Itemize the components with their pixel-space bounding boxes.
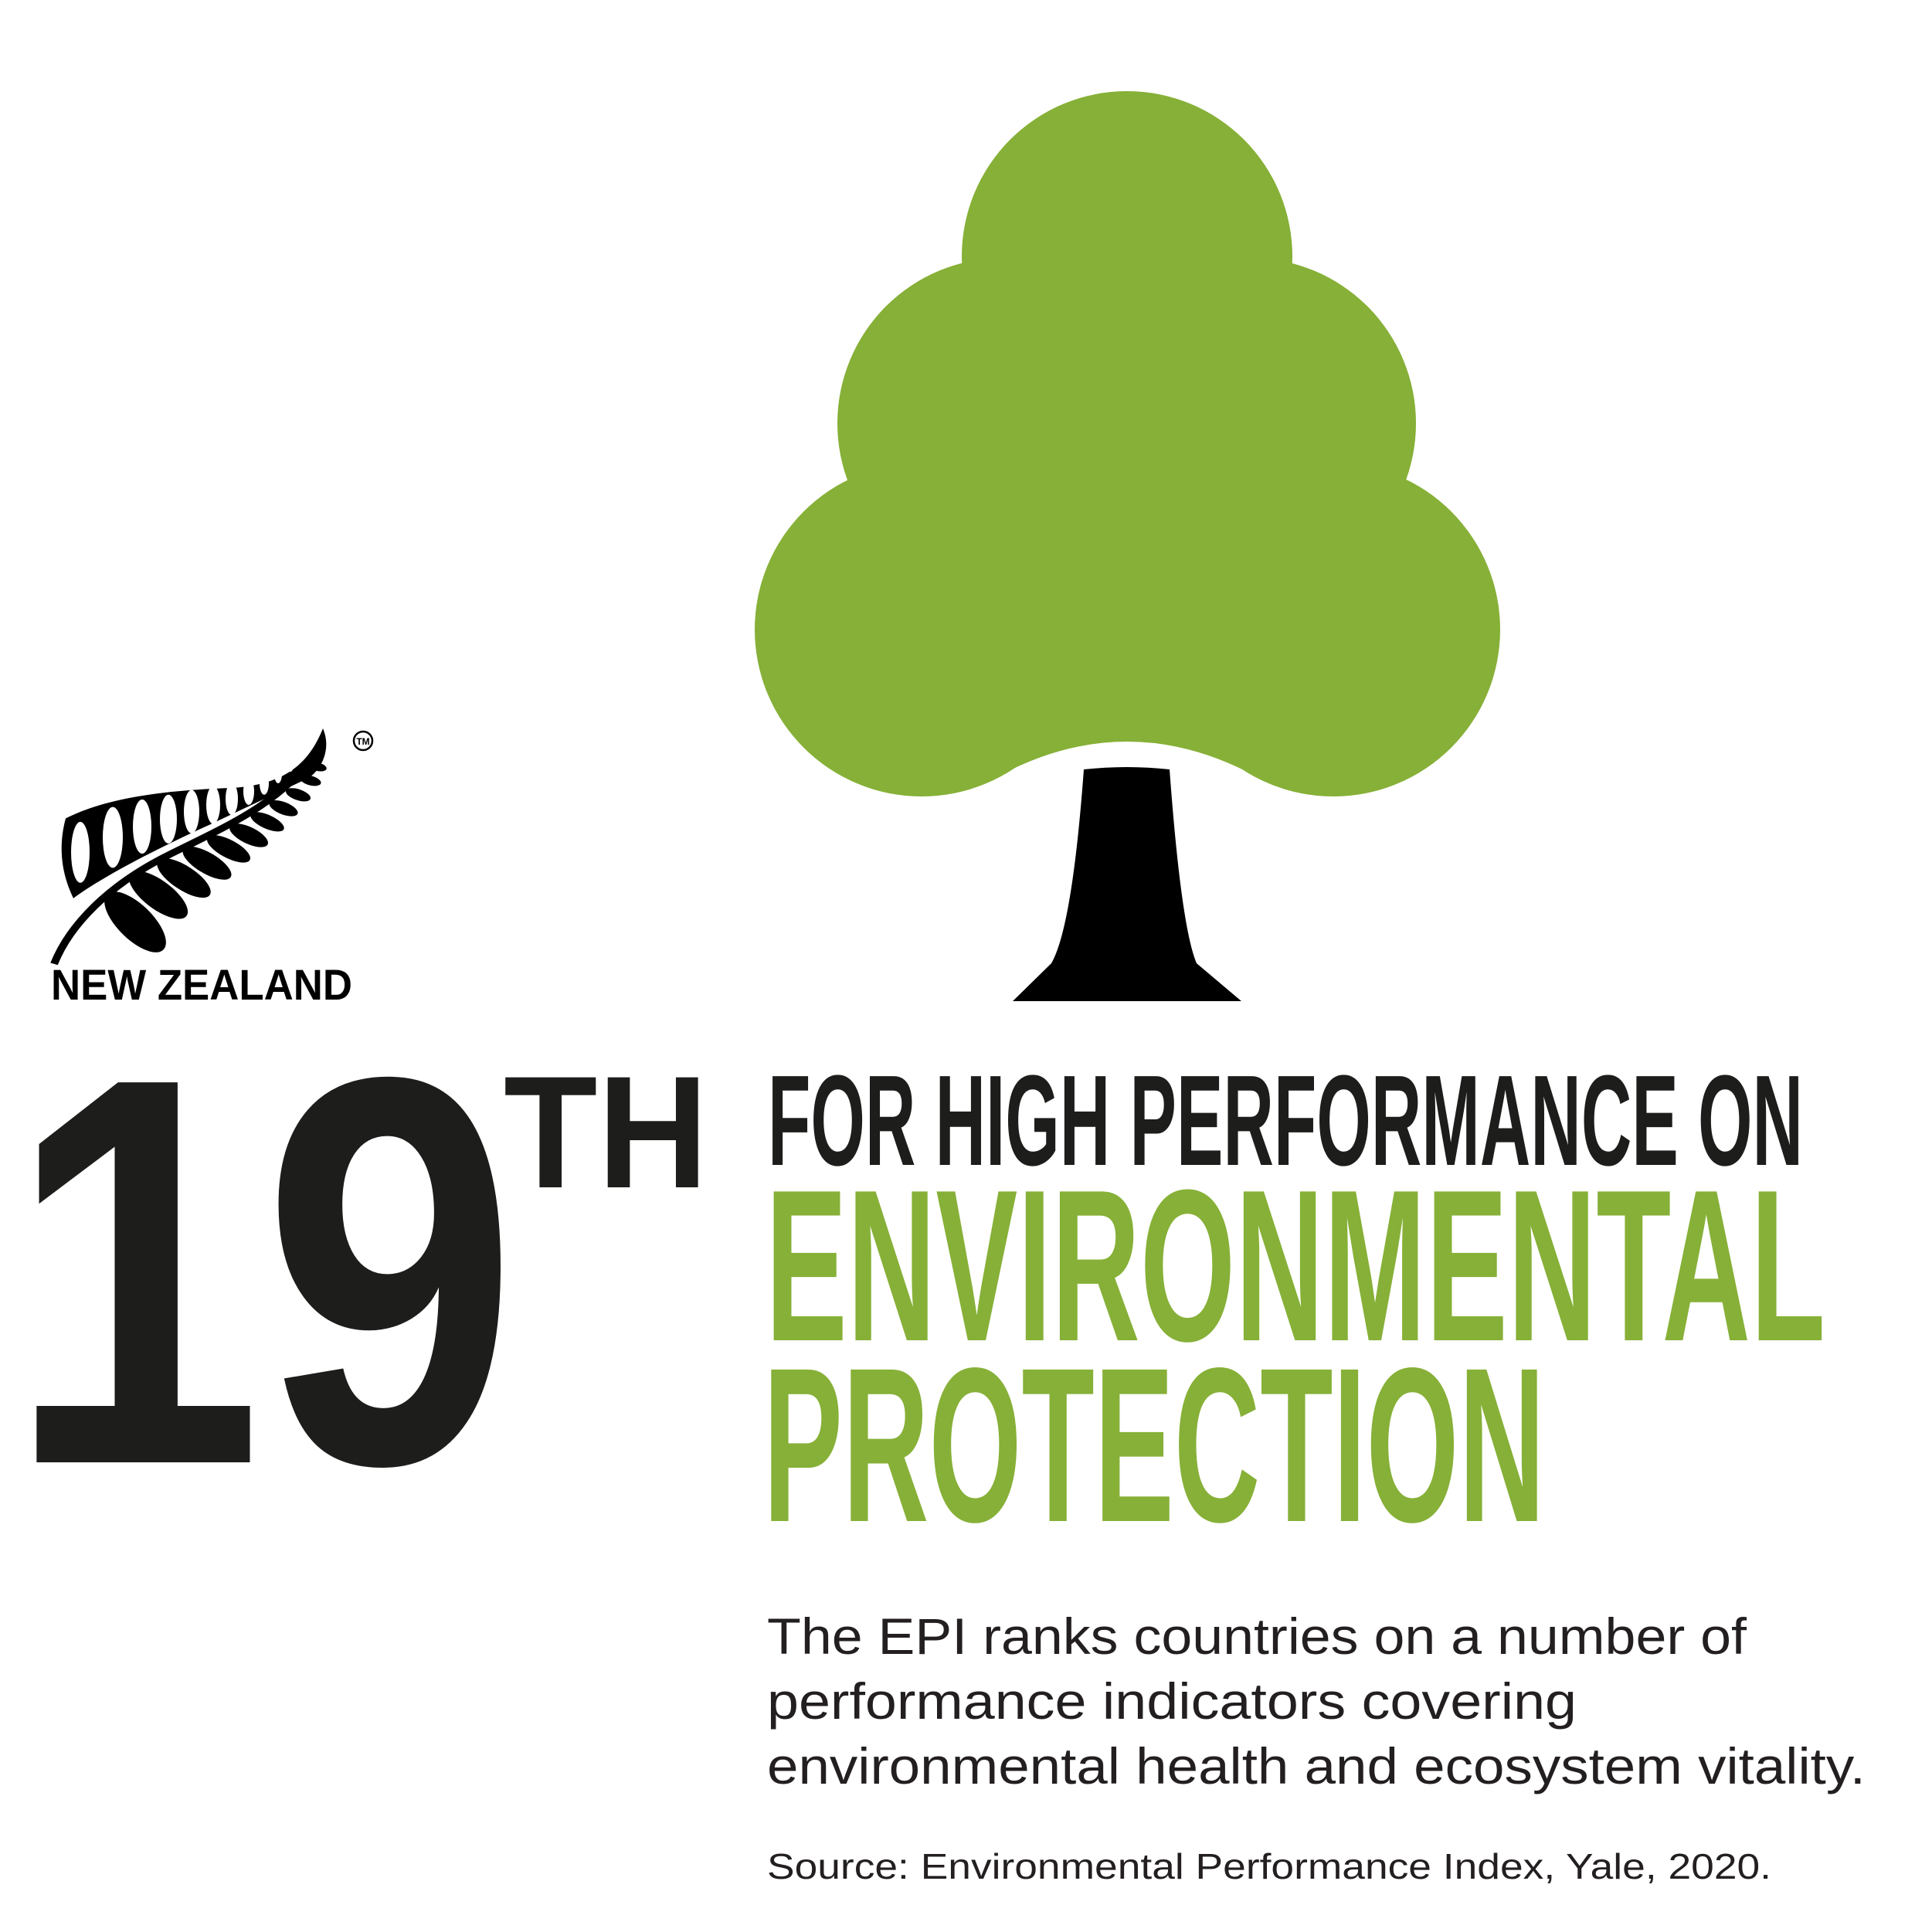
source note: Source: Environmental Performance Index, Yale, 2020. [767,1846,1771,1886]
description text: performance indicators covering [767,1672,1577,1730]
logo: New Zealand fern [51,728,372,1009]
logo wordmark: NEW ZEALAND [51,960,352,1009]
fern frond [54,728,328,964]
ordinal suffix: TH [504,1043,708,1221]
rank number: 19 [8,963,518,1580]
tree trunk [1013,767,1241,1001]
description text [767,1608,1866,1794]
icon: tree [755,91,1500,1001]
tree canopy [755,91,1500,796]
headline [763,1049,1825,1568]
trademark symbol [354,732,372,750]
trademark symbol: TM [356,736,370,747]
description text: The EPI ranks countries on a number of [767,1608,1747,1665]
description text: environmental health and ecosystem vitality. [767,1737,1866,1794]
